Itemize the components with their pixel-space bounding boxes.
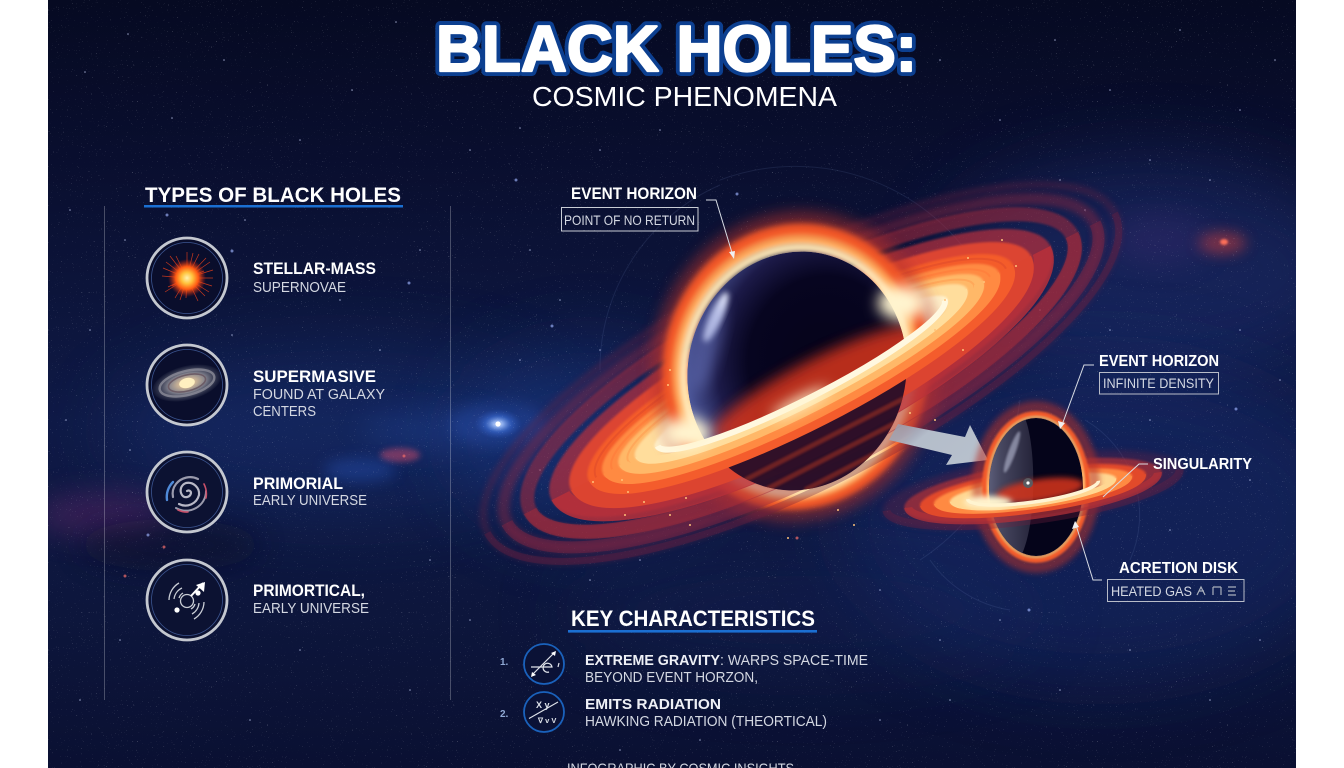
black sphere — [687, 252, 904, 490]
title and text — [585, 653, 868, 686]
singularity dot — [1023, 478, 1033, 488]
icon: equations — [524, 692, 564, 732]
label: SINGULARITY — [1153, 456, 1252, 473]
icon: swirl — [147, 452, 227, 532]
small black hole cross-section — [878, 407, 1188, 567]
small horizon glow — [978, 407, 1094, 567]
label box: HEATED GAS — [1111, 584, 1192, 599]
faint orbit arcs — [600, 166, 1140, 610]
small sphere halves — [989, 418, 1083, 556]
heading underline — [568, 630, 817, 633]
accretion disk: back layer — [478, 179, 1124, 567]
characteristic 1 — [500, 644, 868, 686]
type: supermassive — [147, 345, 385, 425]
number: 2. — [500, 709, 509, 720]
heading: TYPES OF BLACK HOLES — [145, 184, 401, 207]
icon: orbit and arrow — [147, 560, 227, 640]
callout: event horizon, cross-section — [1058, 353, 1219, 429]
panel: key characteristics — [500, 606, 868, 732]
label: PRIMORIAL — [253, 475, 343, 493]
arrow to cross-section — [889, 424, 988, 465]
subtitle: COSMIC PHENOMENA — [532, 81, 837, 112]
callout: event horizon, main — [562, 185, 735, 259]
panel: types of black holes — [104, 184, 450, 700]
icon: equations: ∇ v V — [537, 716, 556, 725]
icon: supernova — [147, 238, 227, 318]
icon: warped trajectory — [524, 644, 564, 684]
type: stellar-mass — [147, 238, 376, 318]
number: 1. — [500, 657, 509, 668]
description: SUPERNOVAE — [253, 280, 346, 296]
label: PRIMORTICAL, — [253, 582, 365, 600]
small accretion disk: front arc — [882, 469, 1184, 530]
label: ACRETION DISK — [1119, 560, 1238, 577]
callout: singularity — [1103, 456, 1252, 497]
icon: equations: X y — [536, 700, 550, 710]
heading underline — [144, 205, 403, 208]
panel dividers — [104, 206, 450, 700]
disk hot spots — [662, 286, 926, 449]
small accretion disk: back layer — [881, 448, 1185, 532]
accretion disk: front bright bands — [589, 266, 1015, 494]
label box — [562, 208, 698, 231]
callout: accretion disk — [1072, 521, 1244, 602]
label box: INFINITE DENSITY — [1103, 376, 1214, 391]
icon: spiral galaxy — [147, 345, 227, 425]
title and text: EMITS RADIATION — [585, 697, 721, 713]
disk sparks — [593, 240, 1016, 538]
title block — [435, 20, 916, 106]
type: primordial — [147, 452, 367, 532]
title and text: EXTREME GRAVITY — [585, 653, 720, 669]
label: EVENT HORIZON — [1099, 353, 1219, 370]
leader arrow — [1058, 365, 1094, 429]
description — [253, 387, 385, 420]
description: FOUND AT GALAXY — [253, 387, 385, 403]
label: EVENT HORIZON — [571, 185, 697, 203]
label: STELLAR-MASS — [253, 260, 376, 278]
title and text: BEYOND EVENT HORZON, — [585, 670, 758, 686]
characteristic 2 — [500, 692, 827, 732]
label: SUPERMASIVE — [253, 368, 376, 386]
description: CENTERS — [253, 404, 316, 420]
leader arrow — [1072, 521, 1102, 580]
lower sphere with dark bands — [728, 379, 906, 490]
main black hole illustration — [478, 179, 1185, 576]
leader line — [1103, 464, 1148, 497]
title and text: HAWKING RADIATION (THEORTICAL) — [585, 714, 827, 730]
event horizon glow — [643, 202, 942, 530]
description: EARLY UNIVERSE — [253, 601, 369, 617]
small disk hot spot — [964, 496, 1012, 508]
type: primortical — [147, 560, 369, 640]
leader arrow — [706, 200, 735, 259]
title and text: : WARPS SPACE-TIME — [720, 653, 868, 669]
label box — [1100, 372, 1218, 394]
label box — [1108, 580, 1244, 602]
main title outline: BLACK HOLES: — [436, 12, 917, 85]
main title fill: BLACK HOLES: — [436, 12, 917, 85]
heading: KEY CHARACTERISTICS — [571, 606, 815, 631]
accretion disk: front outer bands — [484, 212, 1122, 565]
title and text — [585, 697, 827, 730]
label box: POINT OF NO RETURN — [564, 212, 695, 228]
description: EARLY UNIVERSE — [253, 493, 367, 509]
